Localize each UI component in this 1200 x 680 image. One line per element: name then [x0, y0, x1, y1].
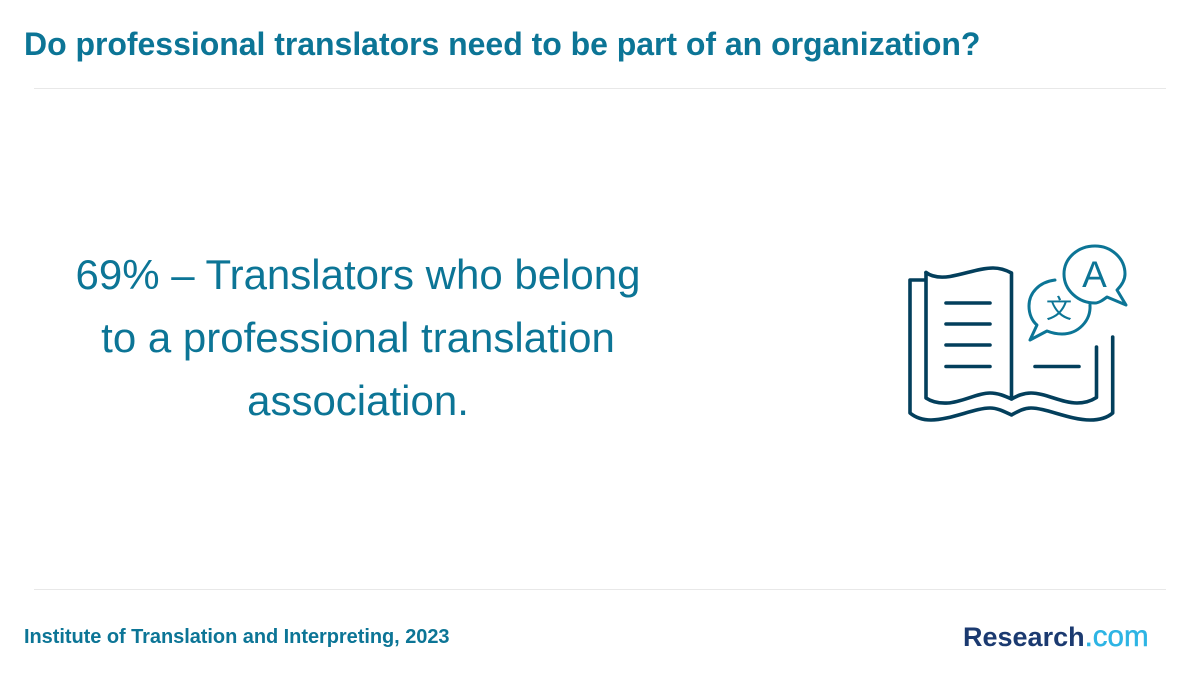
icon: open book with translation speech bubbles — [908, 244, 1128, 422]
title: Do professional translators need to be part of an organization? — [24, 26, 980, 62]
main statistic text: to a professional translation — [101, 314, 615, 361]
main statistic text — [75, 251, 640, 424]
source text: Institute of Translation and Interpreting, 2023 — [24, 626, 450, 648]
logo: Research.com: Research.com — [963, 620, 1149, 653]
icon: speech bubbles: 文 — [1046, 294, 1072, 324]
icon: speech bubbles — [1029, 246, 1126, 340]
icon: open book — [910, 268, 1113, 420]
main statistic text: association. — [247, 377, 469, 424]
icon: speech bubbles: A — [1082, 254, 1107, 295]
main statistic text: 69% – Translators who belong — [75, 251, 640, 298]
